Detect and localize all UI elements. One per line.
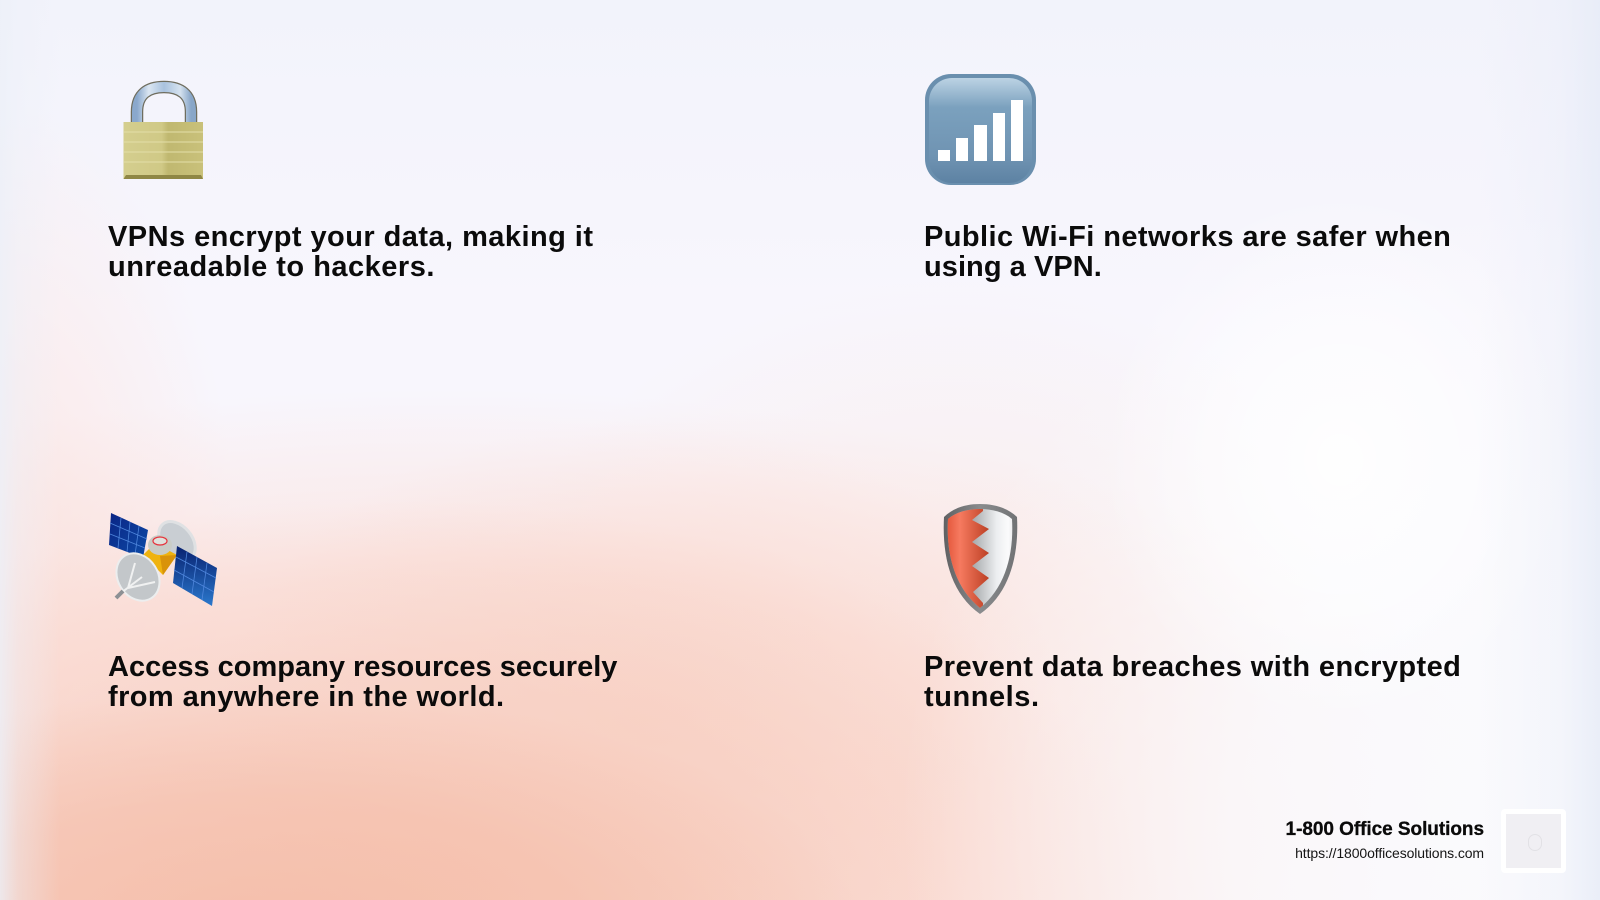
icon: satellite [109,513,217,606]
text: remote access: Access company resources securely [108,651,617,683]
icon: padlock [124,80,203,179]
icon: shield [944,504,1018,614]
icon: signal bars [925,74,1036,185]
logo mark [1528,834,1542,851]
logo placeholder [1501,809,1566,873]
text: VPN encryption: unreadable to hackers. [108,251,435,283]
text: public Wi-Fi: using a VPN. [924,251,1102,283]
text: remote access [108,651,618,713]
text: VPN encryption [108,221,593,283]
brand url: https://1800officesolutions.com [1295,845,1484,861]
text: remote access: from anywhere in the world. [108,681,504,713]
text: VPN encryption: VPNs encrypt your data, making it [108,221,593,253]
text: public Wi-Fi [924,221,1451,283]
text: data breaches: Prevent data breaches with encrypted [924,651,1461,683]
brand name: 1-800 Office Solutions [1286,819,1484,840]
text: data breaches: tunnels. [924,681,1040,713]
text: data breaches [924,651,1461,713]
text: public Wi-Fi: Public Wi-Fi networks are safer when [924,221,1451,253]
